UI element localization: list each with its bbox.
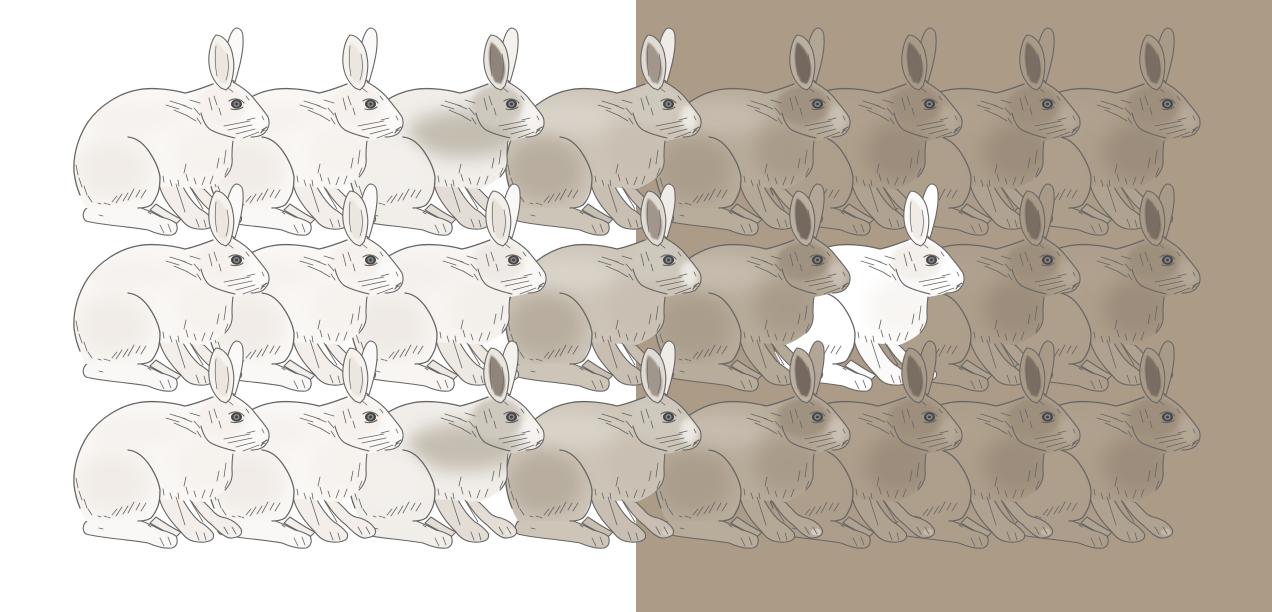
hare: row 1 column 1 [74,28,269,235]
row 1 of hares [74,28,1200,235]
brown background panel [636,0,1272,612]
hare: row 3 column 8 [1005,341,1200,548]
hare: row 2 column 3 [351,184,546,391]
hare: row 1 column 6 [767,28,962,235]
hare: row 1 column 8 [1005,28,1200,235]
hare: row 1 column 2 [208,28,403,235]
hare: row 2 column 4 [506,184,701,391]
hare: row 2 column 8 [1005,184,1200,391]
hare: row 1 column 3 [349,28,544,235]
hare: row 3 column 4 [506,341,701,548]
hare: row 3 column 3 [349,341,544,548]
hare: row 1 column 5 [655,28,850,235]
hare: row 2 column 1 [74,184,269,391]
hare: row 1 column 4 [506,28,701,235]
row 2 of hares [74,184,1200,391]
hare: row 2 column 2 [208,184,403,391]
hare: row 2 column 7 [885,184,1080,391]
hare: row 3 column 7 [885,341,1080,548]
hare: row 3 column 6 [767,341,962,548]
hare: row 3 column 2 [208,341,403,548]
hare: row 1 column 7 [885,28,1080,235]
hare: white hare standing out on brown [769,184,964,391]
row 3 of hares [74,341,1200,548]
hare: row 3 column 5 [655,341,850,548]
hare: row 3 column 1 [74,341,269,548]
hare: row 2 column 5 [655,184,850,391]
